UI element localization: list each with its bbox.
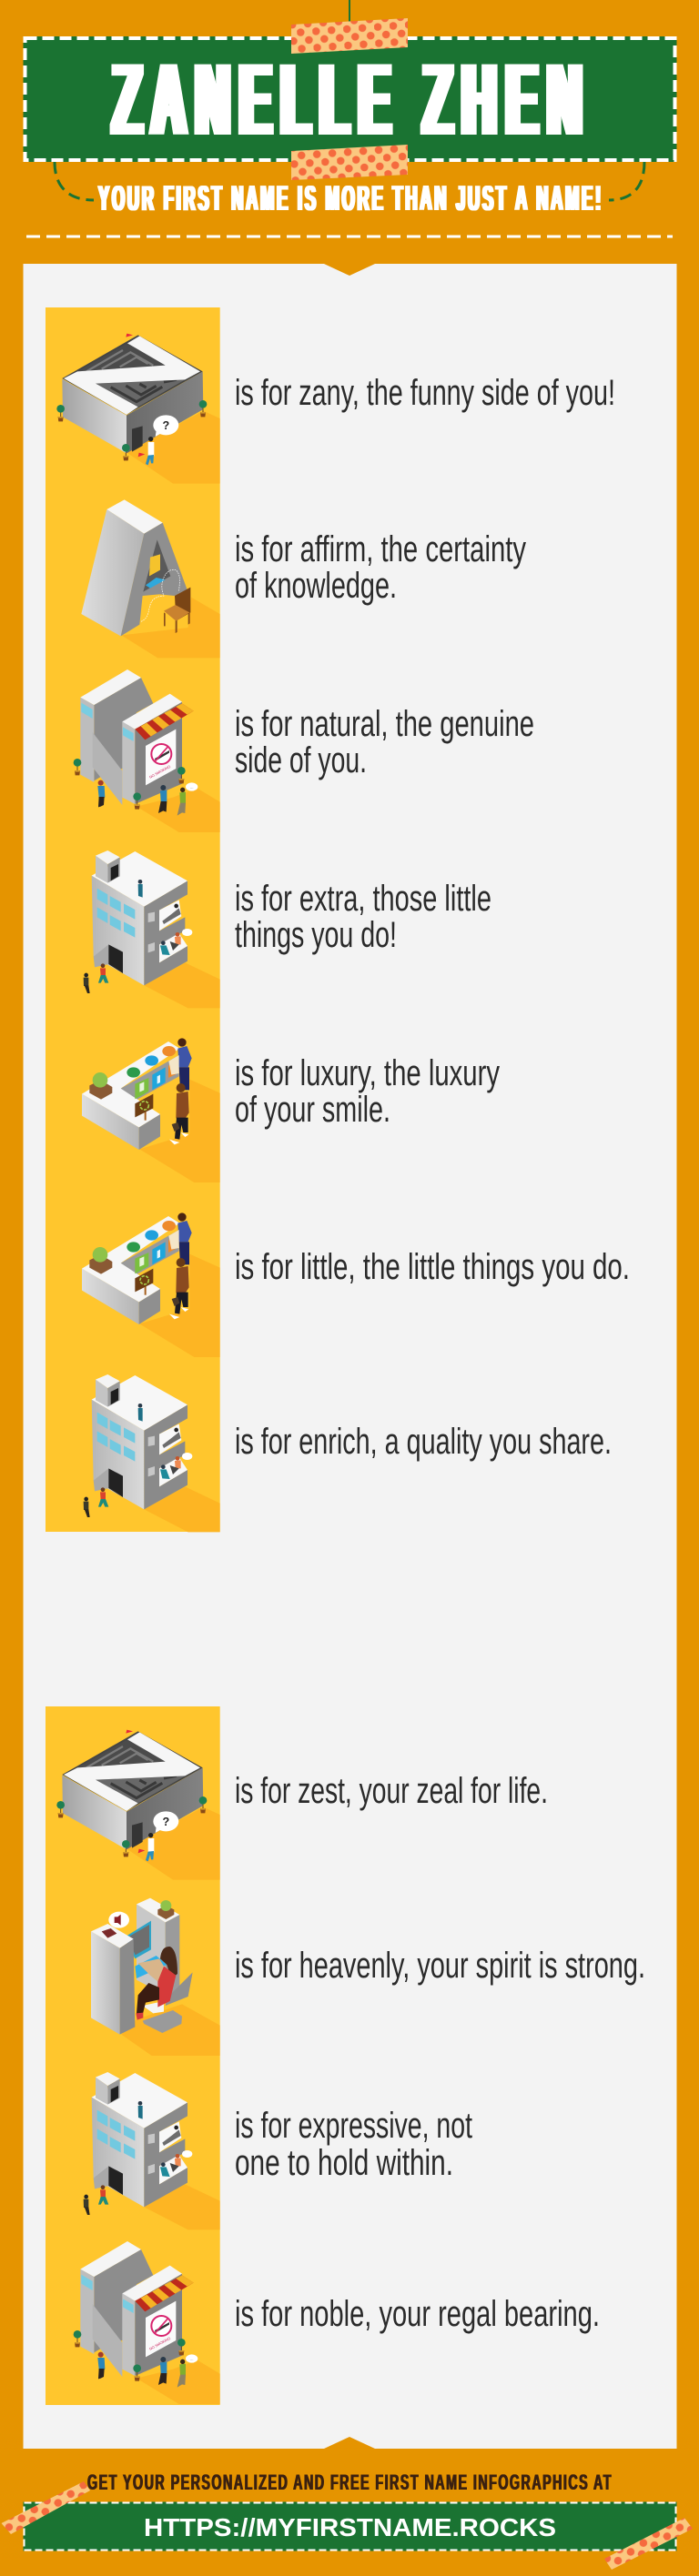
tape left — [2, 2481, 90, 2534]
icon: E third — [84, 2072, 220, 2229]
text: affirm: of knowledge. — [235, 566, 397, 606]
tape bottom — [291, 145, 408, 180]
text: expressive: one to hold within. — [235, 2143, 453, 2183]
panel: content card — [24, 264, 677, 2449]
text: natural: is for natural, the genuine — [235, 704, 534, 744]
text: luxury: of your smile. — [235, 1090, 390, 1130]
tape top — [291, 18, 408, 54]
icon: L — [82, 1038, 220, 1182]
text: natural — [235, 704, 534, 780]
text: luxury — [235, 1053, 500, 1130]
icon: H — [91, 1898, 220, 2056]
footer — [2, 2470, 693, 2570]
yellow strip 1 — [46, 307, 220, 1532]
header — [24, 0, 677, 218]
yellow strip 2 — [46, 1706, 220, 2405]
icon: E — [84, 850, 220, 1008]
text: natural: side of you. — [235, 740, 367, 780]
icon: Z second — [56, 1730, 220, 1880]
text: luxury: is for luxury, the luxury — [235, 1053, 500, 1093]
text: extra: is for extra, those little — [235, 879, 491, 919]
icon: A — [81, 499, 220, 658]
icon: Z maze — [56, 334, 220, 484]
text: zest: is for zest, your zeal for life. — [235, 1771, 548, 1811]
text: extra: things you do! — [235, 915, 397, 955]
footer url: HTTPS://MYFIRSTNAME.ROCKS — [144, 2513, 556, 2541]
curve connector left — [55, 162, 94, 200]
text: affirm: is for affirm, the certainty — [235, 529, 526, 569]
icon: N second — [74, 2241, 220, 2404]
text: expressive: is for expressive, not — [235, 2106, 472, 2146]
icon: L second — [82, 1213, 220, 1357]
curve connector right — [609, 162, 644, 200]
text: extra — [235, 879, 491, 955]
icon: N — [74, 669, 220, 832]
text: expressive — [235, 2106, 472, 2183]
icon: E second — [84, 1374, 220, 1532]
title banner — [24, 36, 677, 162]
tape right — [604, 2518, 693, 2570]
footer banner — [24, 2501, 677, 2551]
text: affirm — [235, 529, 526, 606]
